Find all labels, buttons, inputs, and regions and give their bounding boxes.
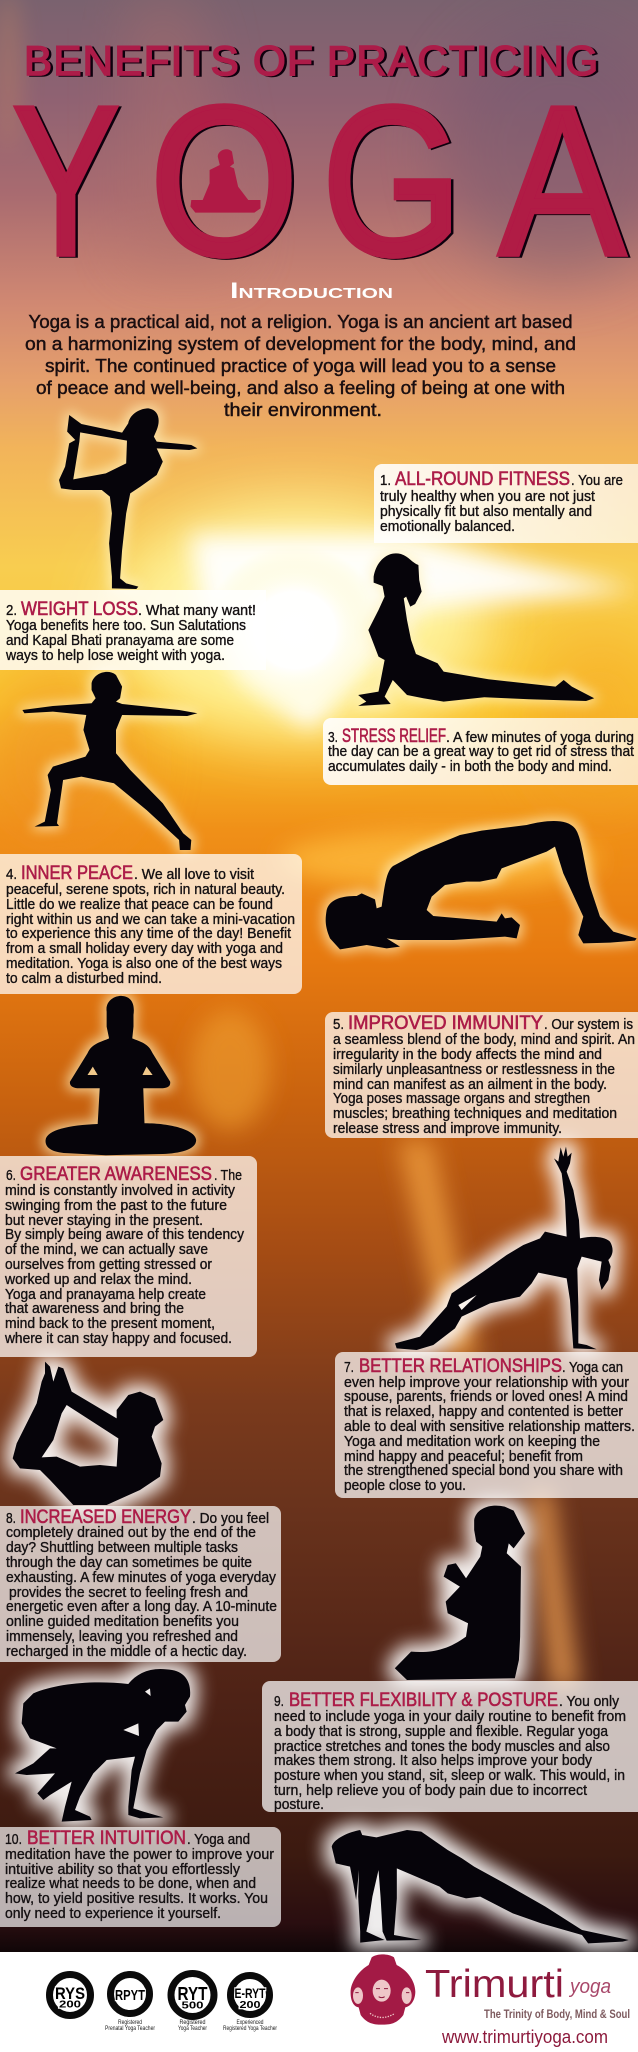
panel 7: better relationships (335, 1352, 638, 1498)
intro paragraph: spirit. The continued practice of yoga will lead you to a sense (45, 356, 556, 376)
panel 5: improved immunity: release stress and improve immunity. (333, 1121, 562, 1137)
panel 4: inner peace: 4. (6, 867, 17, 883)
panel 6: greater awareness: mind is constantly involved in activity (5, 1183, 236, 1199)
panel 9: better flexibility and posture (262, 1681, 638, 1813)
panel 6: greater awareness: worked up and relax the mind. (4, 1272, 192, 1288)
panel 6: greater awareness: 6. (6, 1168, 16, 1184)
panel 4: inner peace: right within us and we can take a mini-vacation (6, 912, 295, 928)
panel 8: increased energy: through the day can sometimes be quite (6, 1555, 252, 1571)
silhouette: dancer pose (59, 408, 197, 589)
panel 6: greater awareness: mind back to the present moment, (5, 1316, 215, 1332)
panel 8: increased energy: completely drained out by the end of the (6, 1525, 256, 1541)
panel 6: greater awareness: ourselves from getting stressed or (5, 1257, 212, 1273)
panel 8: increased energy: provides the secret to feeling fresh and (9, 1585, 248, 1601)
panel 9: better flexibility and posture: posture. (274, 1797, 324, 1813)
panel 7: better relationships: spouse, parents, friends or loved ones! A mind (344, 1389, 628, 1405)
badge: E-RYT 200: 200 (240, 1999, 261, 2011)
silhouette: seated prayer pose (395, 1506, 525, 1680)
panel 8: increased energy: . Do you feel (192, 1511, 269, 1527)
badge: RYT 500: Yoga Teacher (178, 2025, 208, 2032)
panel 10: better intuition: realize what needs to be done, when and (5, 1876, 256, 1892)
silhouette: crow pose (15, 1669, 190, 1822)
silhouette: seated lotus pose (46, 996, 196, 1155)
panel 6: greater awareness: GREATER AWARENESS (20, 1164, 212, 1185)
logo: Trimurti wordmark: yoga (568, 1976, 611, 1998)
panel 8: increased energy: online guided meditation benefits you (6, 1614, 239, 1630)
panel 1: all-round fitness: truly healthy when you are not just (380, 489, 595, 505)
panel 3: stress relief (323, 718, 638, 785)
panel 5: improved immunity: Yoga poses massage organs and stregthen (333, 1091, 590, 1107)
logo: three-faced head (351, 1954, 415, 2025)
panel 4: inner peace: INNER PEACE (21, 863, 133, 884)
intro paragraph: on a harmonizing system of development for the body, mind, and (25, 334, 576, 354)
panel 6: greater awareness: that awareness and bring the (5, 1301, 184, 1317)
badge: E-RYT 200 (223, 1976, 278, 2032)
panel 8: increased energy: energetic even after a long day. A 10-minute (6, 1599, 277, 1615)
badge: RPYT: Registered (118, 2019, 142, 2026)
panel 5: improved immunity: IMPROVED IMMUNITY (348, 1013, 543, 1034)
panel 1: all-round fitness (374, 464, 638, 543)
badge: RPYT (105, 1974, 156, 2032)
heading: Introduction: Introduction (230, 278, 393, 303)
panel 9: better flexibility and posture: BETTER FLEXIBILITY & POSTURE (289, 1690, 558, 1711)
panel 8: increased energy: INCREASED ENERGY (20, 1507, 191, 1528)
silhouette: upward plank pose (332, 1830, 629, 1943)
panel 1: all-round fitness: physically fit but also mentally and (380, 504, 592, 520)
panel 2: weight loss: WEIGHT LOSS (21, 599, 138, 620)
badge: RYS 200: RYS (55, 1985, 85, 2003)
logo: Trimurti wordmark: Trimurti (425, 1963, 564, 2006)
badge: RPYT: Prenatal Yoga Teacher (105, 2025, 156, 2032)
panel 4: inner peace: . We all love to visit (134, 867, 254, 883)
panel 6: greater awareness: Yoga and pranayama help create (5, 1287, 206, 1303)
badge: RYS 200 (50, 1974, 90, 2016)
panel 7: better relationships: the strengthened special bond you share with (344, 1463, 623, 1479)
panel 8: increased energy: recharged in the middle of a hectic day. (6, 1644, 247, 1660)
badge: RYT 500: RYT (178, 1984, 208, 2004)
panel 9: better flexibility and posture: posture when you stand, sit, sleep or walk. This would, in (274, 1768, 625, 1784)
panel 4: inner peace: peaceful, serene spots, rich in natural beauty. (6, 882, 285, 898)
silhouette: bow pose (13, 1362, 163, 1505)
panel 10: better intuition: BETTER INTUITION (27, 1828, 186, 1849)
panel 2: weight loss: and Kapal Bhati pranayama are some (6, 633, 234, 649)
panel 8: increased energy: 8. (6, 1511, 16, 1527)
title: Benefits of Practicing: BENEFITS OF PRACTICING (24, 37, 598, 84)
panel 2: weight loss: 2. (6, 603, 17, 619)
panel 7: better relationships: that is relaxed, happy and contented is better (344, 1404, 623, 1420)
badge: E-RYT 200: E-RYT (234, 1985, 266, 2001)
panel 1: all-round fitness: ALL-ROUND FITNESS (395, 469, 570, 490)
silhouette: warrior pose (22, 672, 197, 850)
panel 7: better relationships: BETTER RELATIONSHIPS (359, 1356, 562, 1377)
panel 10: better intuition: only need to experience it yourself. (5, 1906, 221, 1922)
panel 5: improved immunity: irregularity in the body affects the mind and (333, 1047, 602, 1063)
panel 6: greater awareness: but never staying in the present. (5, 1213, 203, 1229)
panel 2: weight loss: . What many want! (138, 603, 256, 619)
badge: RYT 500: 500 (182, 2000, 204, 2012)
panel 8: increased energy: day? Shuttling between multiple tasks (6, 1540, 238, 1556)
panel 5: improved immunity (325, 1012, 638, 1138)
panel 6: greater awareness (0, 1156, 257, 1357)
panel 2: weight loss: Yoga benefits here too. Sun Salutations (6, 618, 246, 634)
panel 5: improved immunity: 5. (333, 1017, 344, 1033)
panel 8: increased energy: immensely, leaving you refreshed and (6, 1629, 238, 1645)
panel 4: inner peace: to calm a disturbed mind. (6, 971, 162, 987)
panel 10: better intuition: intuitive ability so that you effortlessly (5, 1862, 241, 1878)
intro paragraph: Yoga is a practical aid, not a religion. Yoga is an ancient art based (28, 312, 572, 332)
silhouette: bridge pose (326, 821, 637, 949)
title: YOGA: A (499, 62, 625, 299)
panel 4: inner peace (0, 854, 302, 994)
panel 6: greater awareness: where it can stay happy and focused. (4, 1331, 232, 1347)
intro paragraph: of peace and well-being, and also a feeling of being at one with (36, 378, 565, 398)
panel 7: better relationships: even help improve your relationship with your (344, 1375, 629, 1391)
panel 3: stress relief: STRESS RELIEF (342, 726, 446, 747)
panel 9: better flexibility and posture: makes them strong. It also helps improve your body (274, 1753, 593, 1769)
panel 5: improved immunity: . Our system is (544, 1017, 633, 1033)
panel 4: inner peace: meditation. Yoga is also one of the best ways (6, 956, 282, 972)
title: YOGA (13, 62, 625, 299)
icon: meditating figure inside the O (190, 149, 260, 213)
footer band (0, 1952, 638, 2052)
panel 3: stress relief: accumulates daily - in both the body and mind. (328, 759, 612, 775)
panel 7: better relationships: Yoga and meditation work on keeping the (344, 1434, 600, 1450)
panel 9: better flexibility and posture: practice stretches and tones the body muscles and also (274, 1739, 610, 1755)
panel 7: better relationships: mind happy and peaceful; benefit from (344, 1449, 583, 1465)
panel 9: better flexibility and posture: 9. (274, 1694, 284, 1710)
badge: E-RYT 200: Registered Yoga Teacher (223, 2025, 278, 2032)
panel 8: increased energy (0, 1506, 281, 1662)
panel 2: weight loss (0, 590, 266, 670)
intro paragraph: their environment. (224, 400, 382, 420)
silhouette: cobra pose (358, 553, 594, 706)
panel 1: all-round fitness: 1. (380, 473, 391, 489)
intro paragraph (25, 312, 576, 420)
panel 5: improved immunity: muscles; breathing techniques and meditation (333, 1106, 617, 1122)
panel 6: greater awareness: By simply being aware of this tendency (5, 1227, 245, 1243)
panel 6: greater awareness: swinging from the past to the future (5, 1198, 227, 1214)
panel 2: weight loss: ways to help lose weight with yoga. (5, 648, 225, 664)
panel 10: better intuition (0, 1827, 281, 1927)
panel 6: greater awareness: of the mind, we can actually save (5, 1242, 208, 1258)
title: YOGA: O (150, 62, 298, 299)
panel 4: inner peace: Little do we realize that peace can be found (6, 897, 273, 913)
panel 7: better relationships: 7. (344, 1360, 354, 1376)
badge: RYT 500 (171, 1974, 214, 2032)
panel 5: improved immunity: mind can manifest as an ailment in the body. (333, 1077, 607, 1093)
panel 8: increased energy: exhausting. A few minutes of yoga everyday (6, 1570, 277, 1586)
panel 7: better relationships: . Yoga can (562, 1360, 623, 1376)
panel 4: inner peace: from a small holiday every day with yoga and (6, 941, 283, 957)
panel 7: better relationships: able to deal with sensitive relationship matters. (344, 1419, 635, 1435)
panel 7: better relationships: people close to you. (344, 1478, 466, 1494)
panel 10: better intuition: 10. (5, 1832, 22, 1848)
badge: RPYT: RPYT (115, 1987, 145, 2004)
panel 9: better flexibility and posture: need to include yoga in your daily routine to benefit from (274, 1709, 626, 1725)
silhouette: side plank pose (395, 1147, 613, 1350)
panel 1: all-round fitness: . You are (571, 473, 623, 489)
badge: E-RYT 200: Experienced (236, 2019, 264, 2026)
panel 5: improved immunity: similarly unpleasantness or restlessness in the (333, 1062, 615, 1078)
panel 3: stress relief: 3. (328, 730, 338, 746)
title: YOGA: Y (13, 62, 119, 299)
website url: www.trimurtiyoga.com (441, 2027, 608, 2047)
panel 3: stress relief: . A few minutes of yoga during (446, 730, 634, 746)
badge: RYT 500: Registered (180, 2019, 206, 2026)
panel 1: all-round fitness: emotionally balanced. (380, 519, 515, 535)
title: YOGA: G (322, 62, 462, 299)
panel 9: better flexibility and posture: turn, help relieve you of body pain due to incorrect (274, 1783, 587, 1799)
panel 10: better intuition: meditation have the power to improve your (5, 1847, 274, 1863)
badge: RYS 200: 200 (59, 1998, 81, 2010)
panel 6: greater awareness: . The (214, 1168, 242, 1184)
panel 4: inner peace: to experience this any time of the day! Benefit (6, 926, 291, 942)
panel 9: better flexibility and posture: . You only (559, 1694, 620, 1710)
panel 9: better flexibility and posture: a body that is strong, supple and flexible. Regular yoga (274, 1724, 609, 1740)
panel 10: better intuition: how, to yield positive results. It works. You (5, 1891, 268, 1907)
panel 10: better intuition: . Yoga and (187, 1832, 250, 1848)
